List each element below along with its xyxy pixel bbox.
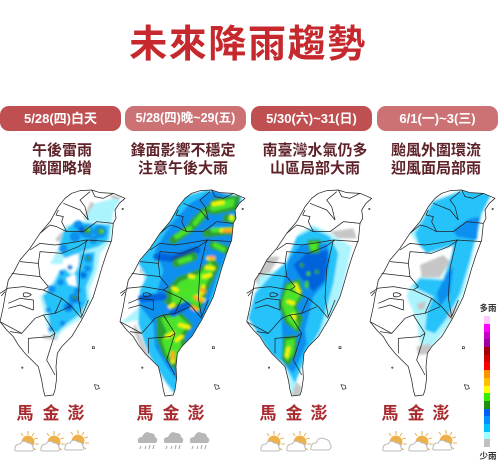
caption: period 1: 午後雷雨 (32, 142, 92, 159)
icons: period 1 (15, 430, 89, 451)
outer islands: period 4 (382, 404, 450, 423)
outer islands: period 1: 澎 (68, 404, 84, 423)
caption: period 3: 山區局部大雨 (270, 160, 360, 177)
map: 5/30 to 31 (247, 190, 372, 397)
legend label: more rain: 多雨 (479, 303, 496, 313)
header: 5/30 to 31: 5/30(六)~31(日) (266, 111, 357, 126)
caption: period 2: 注意午後大雨 (138, 160, 228, 177)
icons: period 3 (261, 431, 331, 451)
caption: period 2: 鋒面影響不穩定 (130, 142, 236, 159)
outer islands: period 4: 馬 (382, 404, 398, 423)
header: 6/1 to 3 (377, 106, 498, 131)
outer islands: period 2 (136, 404, 204, 423)
outer islands: period 3 (260, 404, 328, 423)
outer islands: period 3: 澎 (310, 404, 328, 423)
header: 5/28 daytime (0, 106, 121, 131)
rainfall maps (0, 190, 496, 396)
outer islands: period 2: 澎 (188, 404, 204, 423)
title: 未來降雨趨勢 (129, 24, 367, 66)
caption: period 3 (262, 142, 368, 177)
outer islands: period 2: 金 (162, 404, 180, 423)
caption: period 1: 範圍略增 (32, 160, 92, 177)
outer islands: period 3: 金 (286, 404, 302, 423)
outer islands: period 4: 澎 (432, 404, 450, 423)
header: 5/28 night to 29 (125, 106, 246, 131)
icons: period 4 (383, 430, 457, 451)
caption: period 4 (391, 142, 481, 177)
outer islands: period 3: 馬 (260, 404, 276, 423)
map: 5/28 daytime (0, 190, 125, 396)
legend label: less rain: 少雨 (479, 451, 496, 461)
header: 5/28 daytime: 5/28(四)白天 (24, 111, 97, 126)
caption: period 3: 南臺灣水氣仍多 (262, 142, 368, 159)
outer islands: period 1: 馬 (16, 404, 34, 423)
outer islands: period 4: 金 (408, 404, 424, 423)
caption: period 4: 颱風外圍環流 (391, 142, 481, 159)
caption: period 4: 迎風面局部雨 (391, 160, 481, 177)
caption: period 2 (130, 142, 236, 177)
map: 5/28 night to 29 (120, 190, 245, 397)
legend colour bar (484, 316, 490, 447)
caption: period 1 (32, 142, 92, 177)
outer islands: period 1: 金 (42, 404, 60, 423)
header: 5/30 to 31 (251, 106, 372, 131)
map: 6/1 to 3 (370, 190, 495, 396)
outer islands: period 2: 馬 (136, 404, 154, 423)
icons: period 2 (138, 432, 209, 449)
header: 6/1 to 3: 6/1(一)~3(三) (399, 111, 476, 126)
outer islands: period 1 (16, 404, 84, 423)
header: 5/28 night to 29: 5/28(四)晚~29(五) (136, 111, 235, 125)
